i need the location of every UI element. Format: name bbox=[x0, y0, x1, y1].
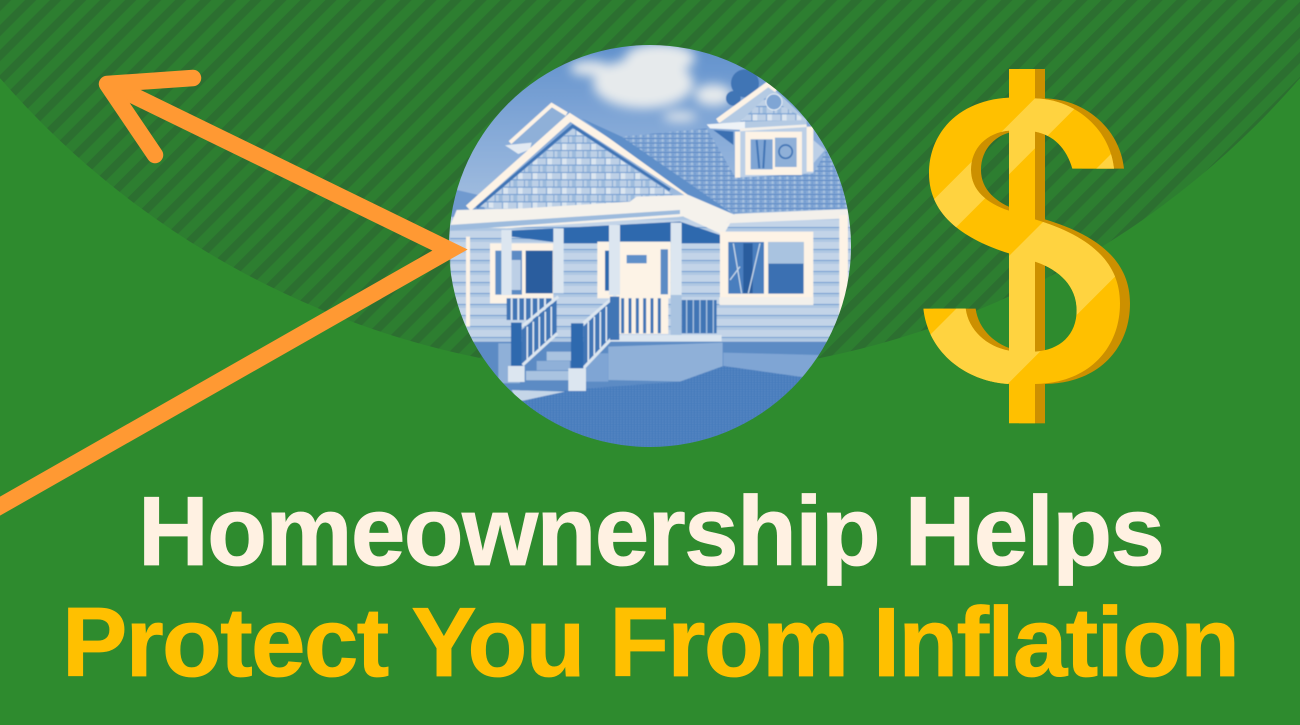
main wall siding bbox=[450, 217, 853, 353]
dollar sign bbox=[923, 69, 1130, 424]
main gable shingles bbox=[480, 128, 673, 210]
porch railing bbox=[507, 295, 722, 343]
left small gable bbox=[505, 105, 568, 154]
front steps bbox=[526, 351, 608, 382]
dollar side shading bbox=[933, 69, 1130, 423]
porch columns bbox=[501, 223, 682, 296]
dormer bbox=[707, 83, 825, 178]
main gable roof edge bbox=[582, 118, 733, 214]
sky bbox=[440, 40, 860, 247]
left porch window bbox=[490, 243, 553, 303]
title line 1: Homeownership Helps bbox=[138, 476, 1165, 586]
base fill below wall bbox=[460, 342, 840, 395]
striped arc background bbox=[0, 0, 1300, 375]
main gable fascia bbox=[468, 117, 688, 208]
left stair railing bbox=[508, 297, 558, 382]
foundation bbox=[608, 343, 723, 382]
orange arrow bbox=[0, 78, 450, 513]
clouds bbox=[570, 43, 732, 121]
arrow head bbox=[107, 78, 193, 155]
porch beam bbox=[450, 195, 735, 235]
front door bbox=[597, 242, 671, 298]
walkway bbox=[512, 390, 565, 401]
title line 2: Protect You From Inflation bbox=[62, 587, 1240, 697]
main gable shadow bbox=[477, 126, 670, 208]
downspouts bbox=[466, 215, 848, 327]
neighbouring house at left bbox=[451, 190, 485, 217]
porch ceiling bbox=[512, 222, 720, 243]
lawn bbox=[521, 366, 802, 447]
arrow shaft bbox=[0, 88, 450, 513]
house photo circle bbox=[440, 40, 860, 453]
dollar highlights bbox=[930, 98, 1115, 384]
tree behind dormer bbox=[726, 69, 759, 106]
rear roof bbox=[622, 128, 853, 213]
right stair railing bbox=[568, 295, 619, 391]
dollar front bbox=[923, 69, 1120, 424]
right window bbox=[719, 232, 813, 305]
